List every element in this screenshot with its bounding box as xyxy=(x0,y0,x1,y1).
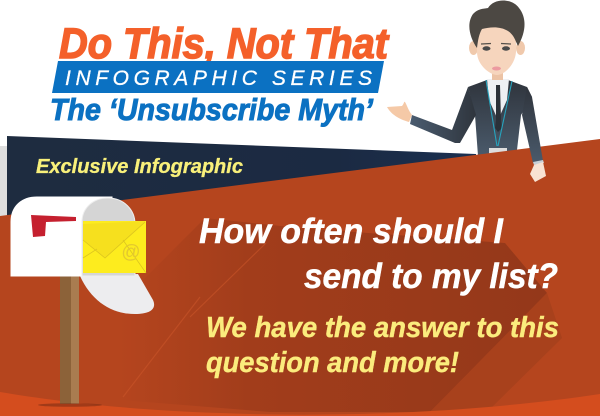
eyebrows xyxy=(481,42,511,45)
presenter right arm and fist xyxy=(522,87,546,182)
grey side strip xyxy=(0,146,7,216)
bright bottom band xyxy=(0,392,600,416)
at sign: @ xyxy=(121,242,140,263)
answer line 2: question and more! xyxy=(206,347,459,379)
face xyxy=(477,25,516,75)
mailbox xyxy=(11,197,154,407)
title: Do This, Not That xyxy=(59,20,390,68)
post shadow xyxy=(38,403,102,407)
post xyxy=(60,276,79,404)
question line 2: send to my list? xyxy=(304,257,558,296)
long shadow: text xyxy=(120,218,547,412)
answer line 1: We have the answer to this xyxy=(206,312,559,344)
envelope xyxy=(83,221,146,273)
eyes xyxy=(482,46,490,51)
orange main panel xyxy=(0,139,600,416)
pointing arm and hand xyxy=(387,87,476,143)
long shadow: lighter edge xyxy=(430,293,562,412)
open door xyxy=(80,274,154,314)
mailbox opening xyxy=(82,198,135,276)
ears xyxy=(469,41,478,55)
subtitle: INFOGRAPHIC SERIES xyxy=(65,67,372,90)
neck xyxy=(492,70,503,80)
light streaks xyxy=(123,243,266,397)
mailbox body xyxy=(11,197,112,276)
blue ribbon xyxy=(52,61,384,93)
series heading: The ‘Unsubscribe Myth’ xyxy=(50,92,373,127)
presenter body xyxy=(468,0,532,156)
mouth xyxy=(492,66,501,70)
hair xyxy=(469,0,525,48)
question line 1: How often should I xyxy=(199,212,504,251)
flag xyxy=(31,215,76,237)
navy banner xyxy=(7,136,476,216)
banner label: Exclusive Infographic xyxy=(36,156,243,178)
